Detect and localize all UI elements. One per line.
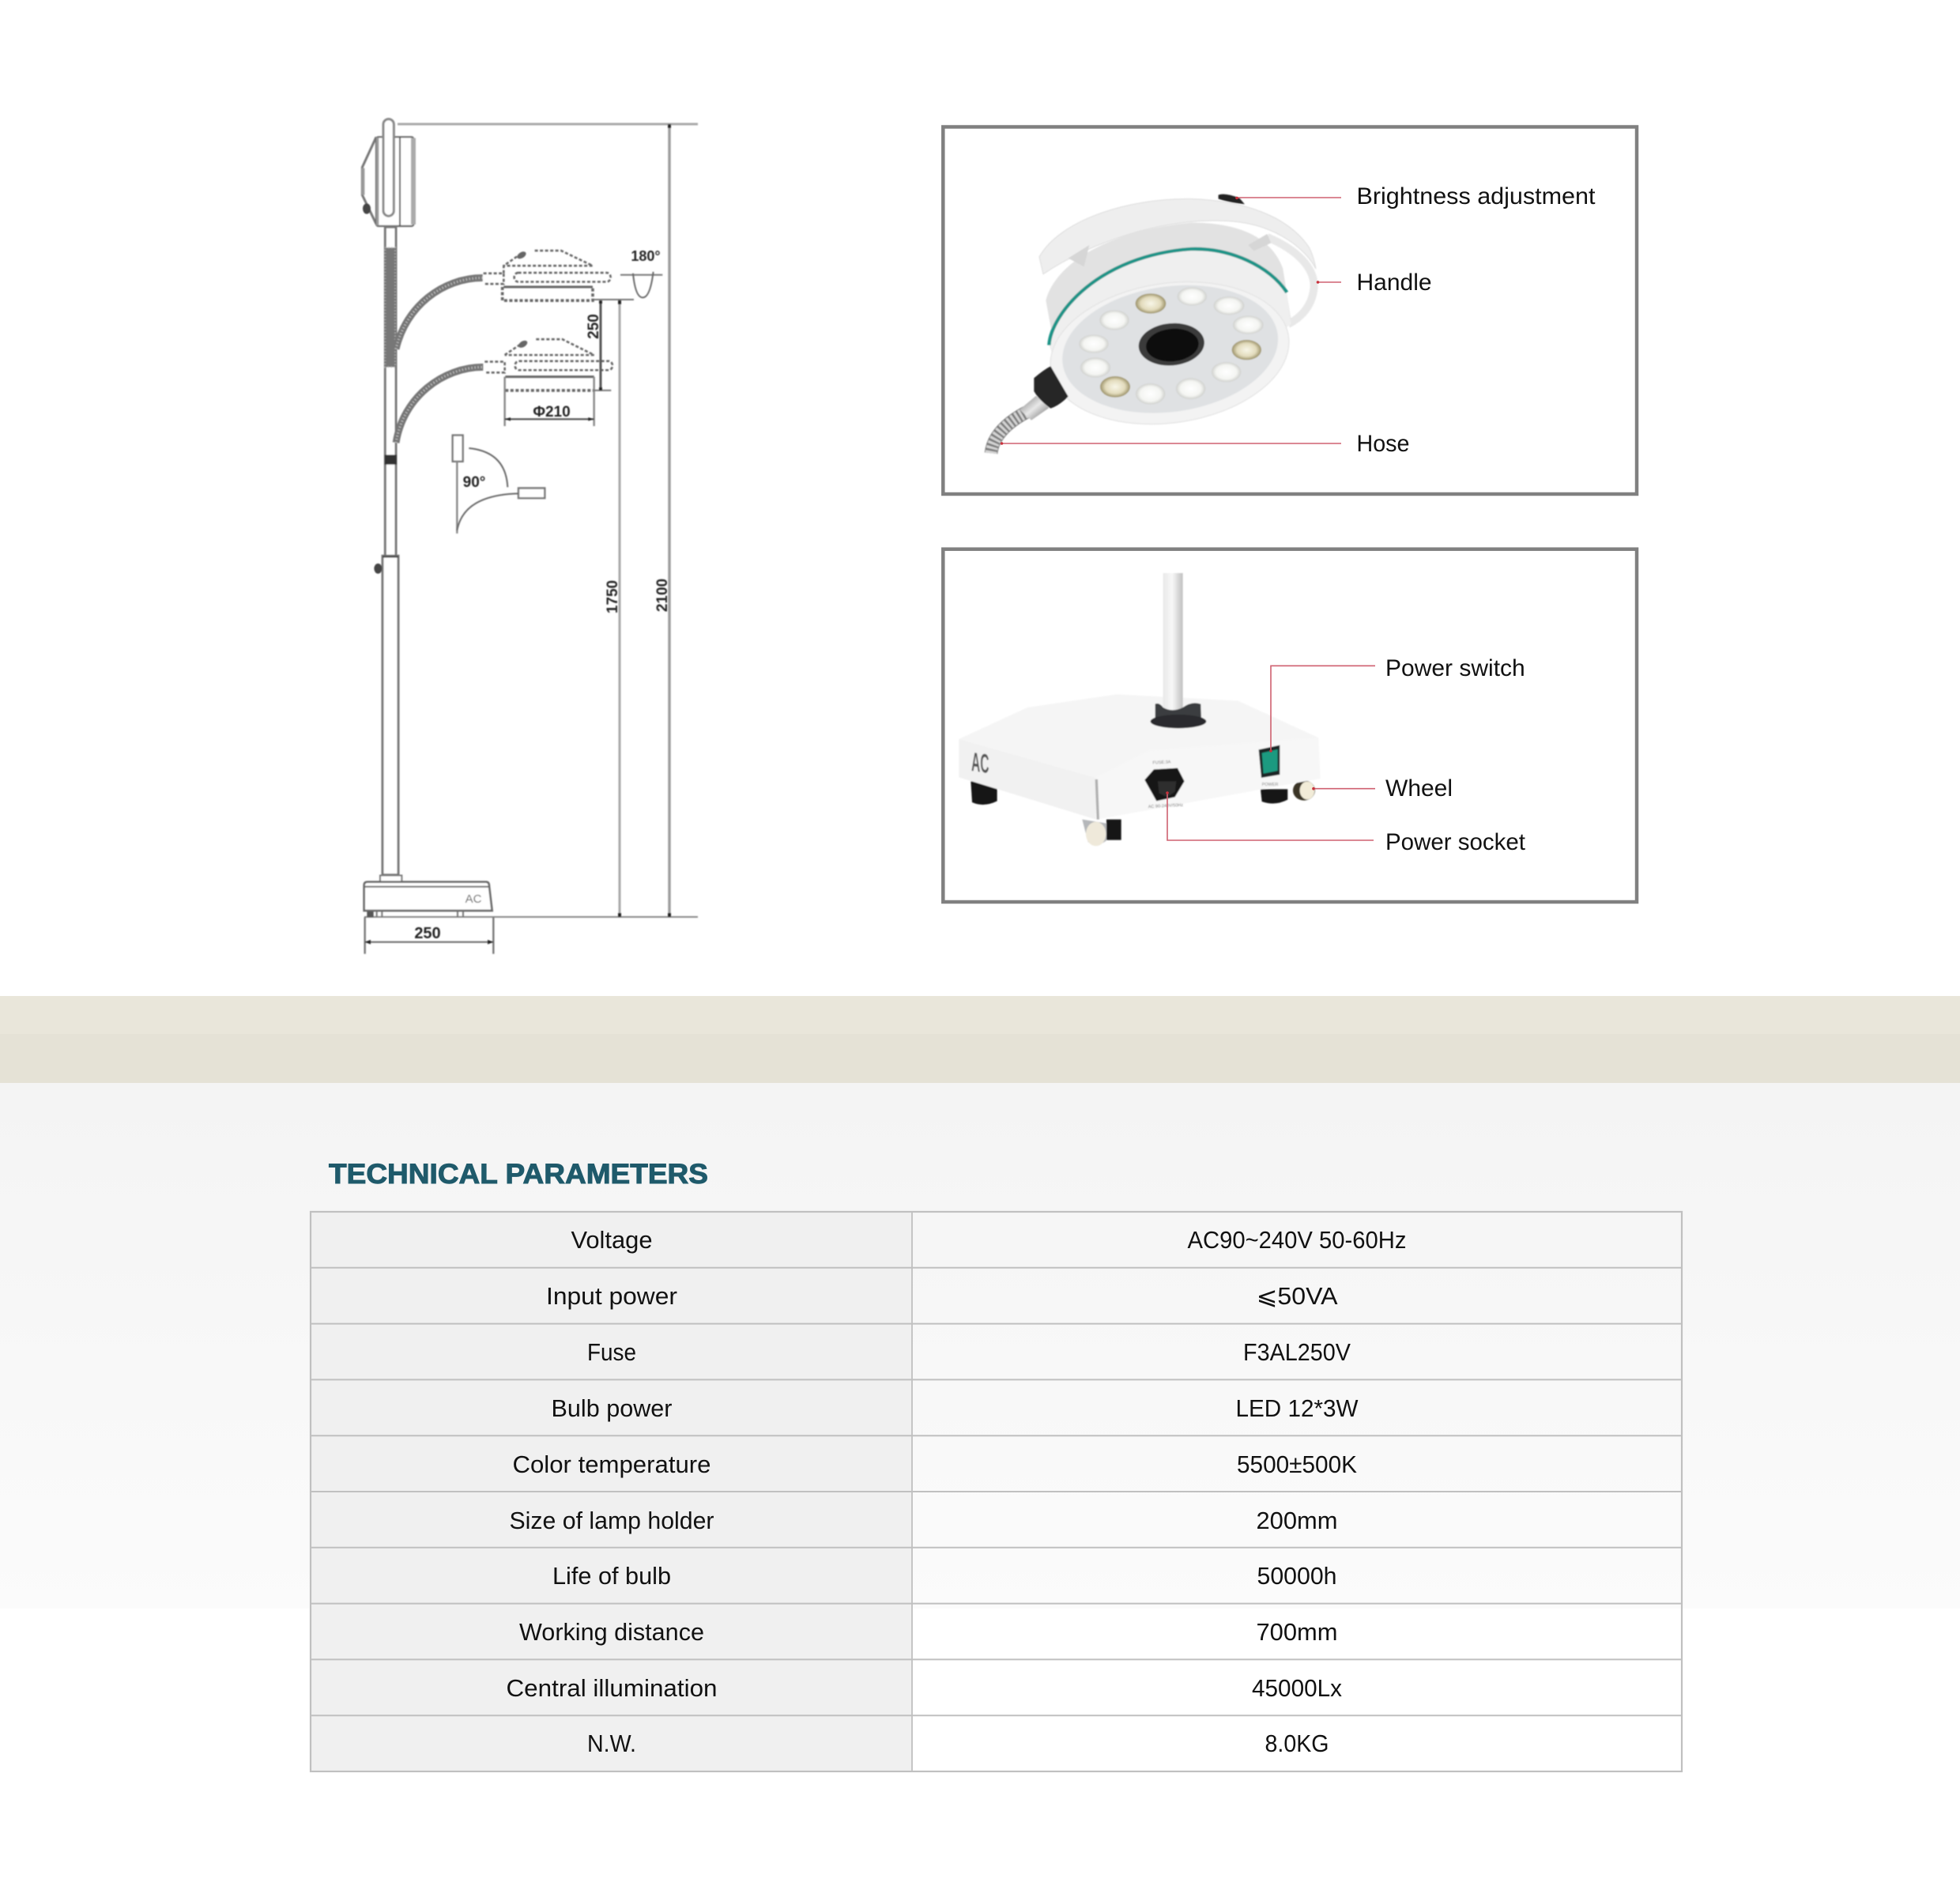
- small text: voltage: AC 90-240V/50Hz: [1148, 803, 1183, 809]
- panel: lamp head photo: [943, 126, 1637, 494]
- row: central illumination: Central illumination: [506, 1675, 718, 1702]
- stand pole with gooseneck arms: [385, 227, 483, 556]
- dimension label: 250 vertical: 250: [586, 314, 602, 339]
- photo: lamp head: [991, 194, 1316, 453]
- label: wheel: Wheel: [1385, 775, 1453, 802]
- row: fuse: [587, 1339, 1351, 1366]
- label: hose: Hose: [1356, 431, 1410, 457]
- icon: teal ring: [1049, 249, 1287, 345]
- leader: power switch: [1269, 666, 1375, 753]
- row: life of bulb: Life of bulb: [552, 1563, 671, 1590]
- row: size of lamp holder: 200mm: [1257, 1507, 1337, 1534]
- stand base: [364, 875, 492, 917]
- row: size of lamp holder: Size of lamp holder: [509, 1507, 714, 1534]
- base width dimension: 250: [414, 925, 441, 942]
- icon: power switch: [1259, 745, 1280, 778]
- icon: shade brim: [1039, 199, 1316, 274]
- row: working distance: [519, 1619, 1337, 1646]
- icon: brightness knob: [1219, 194, 1245, 204]
- icon: socket inlet: [1158, 781, 1176, 797]
- icon: lamp face rim: [1041, 267, 1298, 439]
- leader: wheel: [1312, 787, 1375, 790]
- label: power socket: Power socket: [1385, 829, 1526, 855]
- label: power switch: Power switch: [1385, 655, 1525, 681]
- table: technical parameters: [311, 1212, 1682, 1771]
- label: brightness adjustment: Brightness adjustment: [1356, 183, 1596, 209]
- icon: feet and wheels: [971, 780, 1315, 846]
- overall height dimension lines: [364, 124, 698, 917]
- leader: hose: [1001, 442, 1341, 445]
- light grey section background: [0, 1083, 1960, 1609]
- rotation symbol: 180 degrees: 180°: [631, 248, 661, 264]
- row: voltage: Voltage: [571, 1227, 653, 1254]
- row: net weight: 8.0KG: [1265, 1730, 1329, 1757]
- row: working distance: 700mm: [1257, 1619, 1337, 1646]
- row: central illumination: [506, 1675, 1342, 1702]
- row: central illumination: 45000Lx: [1252, 1675, 1342, 1702]
- rotation symbol: 180 degrees: [620, 248, 662, 297]
- icon: pole collar: [1151, 703, 1206, 728]
- row: net weight: [587, 1730, 1329, 1757]
- icon: shade brackets: [1069, 234, 1271, 266]
- row: bulb power: [552, 1395, 1359, 1422]
- row: size of lamp holder: [509, 1507, 1337, 1534]
- row: life of bulb: 50000h: [1257, 1563, 1337, 1590]
- technical dimension drawing: [361, 119, 698, 954]
- icon: lower body: [1049, 249, 1291, 419]
- row: fuse: Fuse: [587, 1339, 636, 1366]
- icon: hose collar: [1034, 366, 1069, 409]
- leader: power socket: [1166, 791, 1374, 840]
- panel frame: [943, 126, 1637, 494]
- dashed lower lamp position: [484, 300, 612, 426]
- icon: pole: [1163, 573, 1183, 710]
- small text: fuse: FUSE:3A: [1152, 760, 1171, 766]
- icon: lamp body dome: [1046, 223, 1291, 393]
- beige band: [0, 996, 1960, 1083]
- row: color temperature: 5500±500K: [1237, 1451, 1357, 1478]
- left column shading: [311, 1212, 912, 1771]
- panel: stand base photo: [943, 549, 1637, 902]
- leader: brightness adjustment: [1235, 197, 1341, 199]
- base width dimension: [365, 917, 493, 954]
- icon: centre camera hole: [1136, 320, 1206, 368]
- icon: base mark AC: AC: [971, 746, 989, 779]
- row: voltage: AC90~240V 50-60Hz: [1187, 1227, 1407, 1254]
- label: handle: Handle: [1356, 270, 1432, 296]
- lower telescopic pole: [374, 556, 398, 875]
- icon: LED ring: [1079, 287, 1264, 405]
- panel frame: [943, 549, 1637, 902]
- row: input power: [546, 1283, 1338, 1310]
- icon: hose connector: [1020, 396, 1049, 421]
- row: color temperature: [512, 1451, 1357, 1478]
- small text: power: POWER: [1262, 783, 1278, 787]
- dashed upper lamp position: [484, 250, 611, 300]
- rotation symbol: 90 degrees: [453, 436, 545, 534]
- dimension label: 2100: 2100: [654, 579, 671, 612]
- row: bulb power: Bulb power: [552, 1395, 672, 1422]
- row: net weight: N.W.: [587, 1730, 636, 1757]
- icon: base top face: [959, 694, 1318, 778]
- icon: handle loop: [1267, 237, 1314, 324]
- row: input power: ⩽50VA: [1257, 1283, 1338, 1310]
- icon: lamp face: [1054, 272, 1287, 426]
- row: input power: Input power: [546, 1283, 677, 1310]
- icon: base left face: [959, 739, 1096, 820]
- heading: technical parameters: TECHNICAL PARAMETERS: [329, 1158, 708, 1190]
- icon: base front face: [1096, 738, 1321, 820]
- rotation symbol: 90 degrees: 90°: [463, 474, 485, 491]
- leader: handle: [1317, 281, 1341, 284]
- row: color temperature: Color temperature: [512, 1451, 711, 1478]
- icon: power socket: [1144, 768, 1185, 801]
- row: bulb power: LED 12*3W: [1236, 1395, 1359, 1422]
- row: life of bulb: [552, 1563, 1337, 1590]
- icon: metal hose: [991, 413, 1026, 453]
- row: fuse: F3AL250V: [1243, 1339, 1351, 1366]
- row: working distance: Working distance: [519, 1619, 704, 1646]
- dimension label: phi 210: Φ210: [533, 404, 571, 421]
- row: voltage: [571, 1227, 1407, 1254]
- base label AC: AC: [466, 892, 482, 906]
- lamp head side view: [361, 119, 416, 226]
- dimension label: 1750: 1750: [605, 580, 621, 613]
- photo: stand base: [959, 573, 1321, 846]
